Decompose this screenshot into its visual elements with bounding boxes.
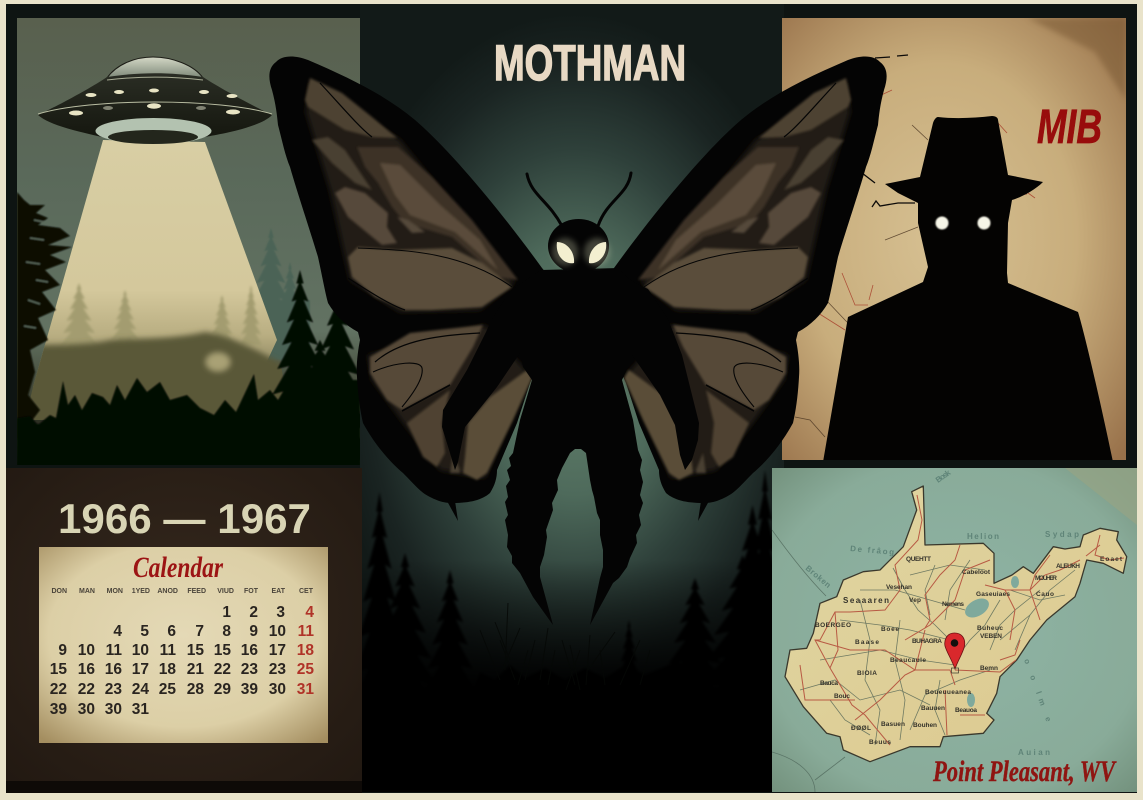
left wings <box>269 56 560 521</box>
date grid: 3 <box>276 604 285 621</box>
date grid: 39 <box>241 681 258 698</box>
town labels: Bauuen <box>921 705 945 712</box>
weekday header: VIUD <box>217 588 234 595</box>
date grid: 16 <box>105 661 122 678</box>
MIB label: MIB <box>1037 101 1102 154</box>
date grid: 16 <box>241 642 258 659</box>
weekday header: MAN <box>79 588 95 595</box>
sea labels: o o lm e <box>1022 658 1055 726</box>
misty trees in beam <box>64 284 260 344</box>
calendar title: Calendar <box>133 551 223 584</box>
glowing eyes <box>936 216 990 230</box>
head <box>548 219 609 273</box>
sea labels: Auian <box>1018 748 1050 757</box>
date grid: 21 <box>187 661 204 678</box>
town labels: Gaseuiaes <box>976 591 1010 598</box>
silhouette <box>823 116 1113 462</box>
town labels: Basuen <box>881 721 905 728</box>
weekday header: EAT <box>272 588 286 595</box>
town labels: Nemens <box>942 601 964 608</box>
town labels: Vesehan <box>886 584 912 591</box>
date grid: 17 <box>132 661 149 678</box>
town labels: Vep <box>909 597 921 604</box>
town labels: Cauo <box>1036 591 1054 598</box>
heading: years: 1966 — 1967 <box>58 495 311 542</box>
date grid: 10 <box>132 642 149 659</box>
town labels: Boee <box>881 626 899 633</box>
town labels: Cabeloot <box>962 569 991 576</box>
date grid: 10 <box>78 642 95 659</box>
date grid: 11 <box>160 642 176 659</box>
date grid: 39 <box>50 701 67 718</box>
date grid: 22 <box>214 661 231 678</box>
weekday header: CET <box>299 588 314 595</box>
date grid: 8 <box>222 623 231 640</box>
date grid: 5 <box>140 623 149 640</box>
forest silhouette <box>362 472 772 662</box>
red weekend column: 4 <box>305 604 314 621</box>
red weekend column <box>297 604 314 698</box>
weekday header: MON <box>107 588 123 595</box>
town labels <box>815 556 1123 746</box>
red weekend column: 18 <box>297 642 314 659</box>
date grid <box>50 604 286 718</box>
panel: UFO over forest <box>17 18 375 466</box>
date grid: 31 <box>132 701 149 718</box>
town labels: Baase <box>855 639 879 646</box>
town labels: BUHAGRA <box>912 638 942 645</box>
date grid: 15 <box>214 642 231 659</box>
location pin <box>945 633 965 673</box>
date grid: 25 <box>159 681 176 698</box>
town labels: Eoaet <box>1100 556 1123 563</box>
red roads <box>800 495 1124 745</box>
town labels: Bemn <box>980 665 998 672</box>
panel: men in black <box>782 18 1126 462</box>
weekday header: 1YED <box>132 588 150 595</box>
town labels: Beauoa <box>955 707 977 714</box>
right wings <box>596 56 887 521</box>
antennae <box>527 173 631 226</box>
date grid: 7 <box>195 623 204 640</box>
misty hill <box>20 332 290 425</box>
date grid: 24 <box>132 681 149 698</box>
date grid: 9 <box>249 623 258 640</box>
town labels: MOUHER <box>1035 575 1057 582</box>
town labels: Boueuueanea <box>925 689 971 696</box>
date grid: 16 <box>78 661 95 678</box>
sea labels: Bosk <box>934 468 953 485</box>
date grid: 1 <box>222 604 231 621</box>
weekday header: DON <box>51 588 67 595</box>
date grid: 23 <box>269 661 286 678</box>
grey roads <box>800 560 1075 745</box>
grass stalks <box>480 603 640 644</box>
dark feathery tree left <box>17 192 72 440</box>
town labels: ÐØØL <box>851 725 871 732</box>
weekday header: FEED <box>187 588 206 595</box>
date grid: 6 <box>167 623 176 640</box>
date grid: 15 <box>50 661 67 678</box>
date grid: 15 <box>187 642 204 659</box>
weekday header: ANOD <box>157 588 178 595</box>
sea labels: Sydap <box>1045 530 1079 539</box>
sea labels <box>804 468 1079 757</box>
calendar card <box>39 547 328 743</box>
body, arms and legs <box>442 268 699 625</box>
state outline <box>785 486 1127 762</box>
panel: central night sky <box>345 4 790 796</box>
date grid: 28 <box>187 681 204 698</box>
date grid: 30 <box>269 681 286 698</box>
date grid: 23 <box>105 681 122 698</box>
date grid: 29 <box>214 681 231 698</box>
date grid: 9 <box>58 642 67 659</box>
date grid: 30 <box>78 701 95 718</box>
date grid: 22 <box>78 681 95 698</box>
town labels: Bauca <box>820 680 838 687</box>
panel: West Virginia map <box>772 468 1137 792</box>
weekday header: FOT <box>244 588 259 595</box>
red weekend column: 31 <box>297 681 314 698</box>
date grid: 10 <box>269 623 286 640</box>
panel: calendar 1966-1967 <box>6 468 362 793</box>
red weekend column: 11 <box>298 623 314 640</box>
light beam <box>33 140 277 390</box>
town labels: QUEHTT <box>906 556 931 563</box>
date grid: 23 <box>241 661 258 678</box>
title: MOTHMAN <box>494 35 686 91</box>
map cracks <box>818 90 1035 330</box>
glowing eyes <box>552 238 610 266</box>
sea labels: Broken <box>804 564 833 590</box>
date grid: 18 <box>159 661 176 678</box>
lakes <box>962 576 1019 707</box>
town labels: Beaucaule <box>890 657 926 664</box>
illustration: Mothman figure <box>269 56 887 625</box>
town labels: Bouhen <box>913 722 937 729</box>
flying saucer <box>38 57 272 144</box>
town labels: BOERGEO <box>815 622 851 629</box>
town labels: Seaaaren <box>843 596 889 605</box>
date grid: 22 <box>50 681 67 698</box>
date grid: 17 <box>269 642 286 659</box>
town labels: ALEUKH <box>1056 563 1080 570</box>
date grid: 11 <box>106 642 122 659</box>
town labels: Bouc <box>834 693 850 700</box>
town labels: BIOIA <box>857 670 877 677</box>
date grid: 2 <box>249 604 258 621</box>
date grid: 4 <box>113 623 122 640</box>
town labels: VEBEN <box>980 633 1002 640</box>
town labels: Beuus <box>869 739 891 746</box>
date grid: 30 <box>105 701 122 718</box>
red weekend column: 25 <box>297 661 314 678</box>
sea labels: Helion <box>967 532 999 541</box>
town labels: Buheuc <box>977 625 1003 632</box>
sea labels: De frâog <box>850 544 895 557</box>
distant misty trees <box>258 230 310 358</box>
dark tree line <box>17 270 375 466</box>
weekday header <box>51 588 314 595</box>
